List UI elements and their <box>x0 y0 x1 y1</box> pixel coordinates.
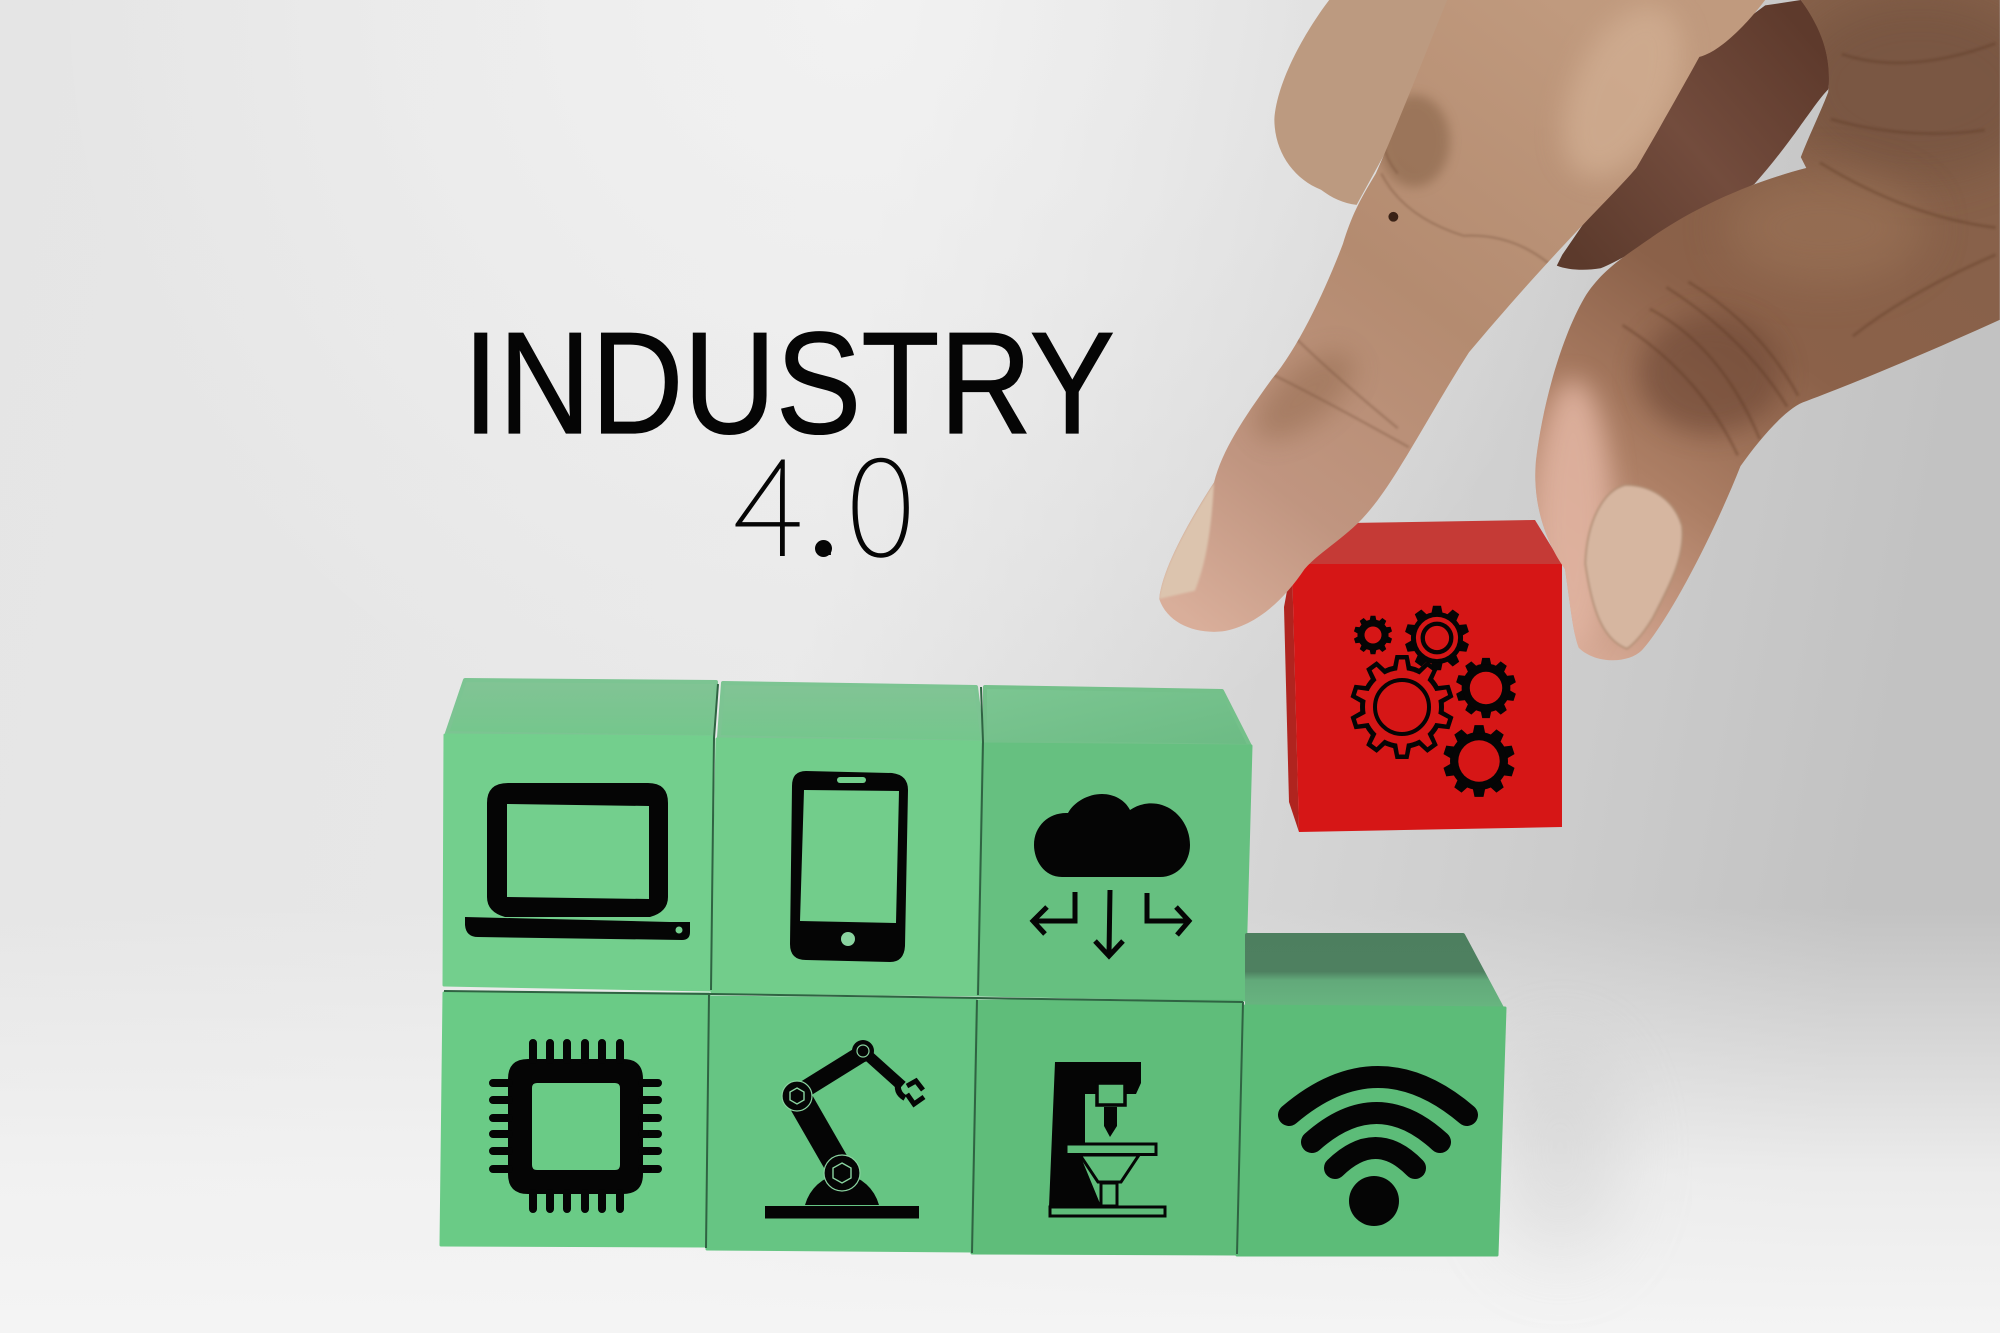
middle finger <box>1274 0 1469 205</box>
subheading: 4.0 <box>733 398 916 596</box>
block: laptop <box>444 680 716 990</box>
block: chip <box>441 993 709 1246</box>
thumbnail <box>1585 485 1682 649</box>
icon: cloud with arrows <box>1033 794 1190 956</box>
fingernail <box>1159 482 1214 599</box>
hand <box>1140 0 2000 672</box>
big outline gear <box>1350 655 1454 759</box>
block: smartphone <box>712 683 983 995</box>
icon: wifi <box>1289 1077 1467 1226</box>
floor shadow <box>1500 1040 1620 1260</box>
block seams <box>444 684 1243 1254</box>
green block stack <box>441 680 1505 1255</box>
index wrinkles <box>1274 150 1548 448</box>
block: cloud <box>978 687 1251 1000</box>
thumb and palm <box>1524 0 2000 672</box>
icon: processor chip <box>493 1043 658 1209</box>
icon: robot arm <box>765 1040 924 1218</box>
bottom gear <box>1443 725 1515 797</box>
top outline gear <box>1405 606 1469 670</box>
icon: smartphone <box>790 771 908 962</box>
icon: laptop <box>465 783 690 940</box>
icon: gears <box>1350 606 1516 797</box>
small gear <box>1354 616 1392 654</box>
block: wifi <box>1237 935 1505 1255</box>
index finger <box>1159 0 1765 632</box>
red block: gears <box>1284 520 1562 832</box>
heading: INDUSTRY: INDUSTRY <box>463 302 1115 464</box>
right gear <box>1456 658 1516 718</box>
subheading: 4.0: . <box>816 483 838 572</box>
icon: CNC machine <box>1049 1062 1165 1216</box>
block: robot arm <box>707 997 976 1251</box>
subheading: 4.0: 4 <box>733 398 804 596</box>
dark gap between fingers <box>1557 0 1830 270</box>
knuckle wrinkles <box>1623 43 1996 455</box>
title <box>463 302 1115 596</box>
subheading: 4.0: 0 <box>845 398 916 596</box>
block: milling machine <box>972 1001 1242 1254</box>
